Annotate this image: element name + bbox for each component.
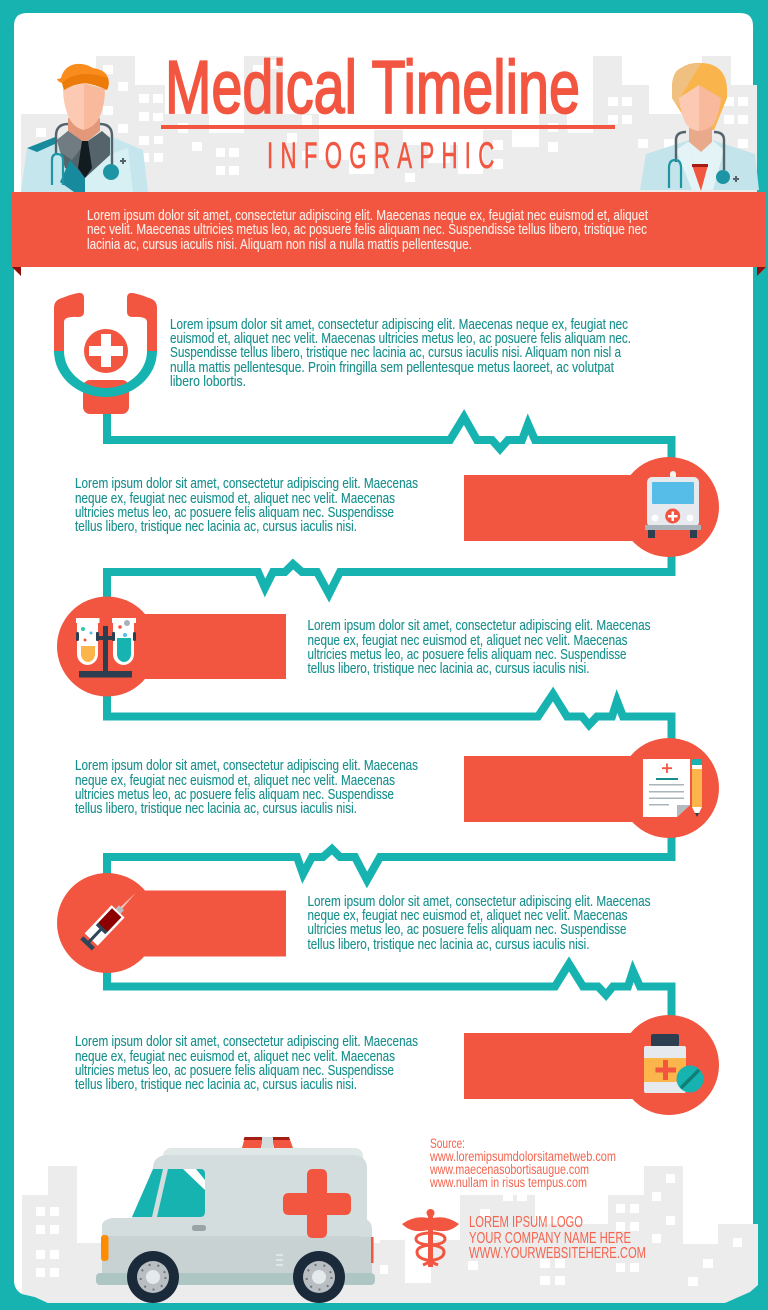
step 4 text (75, 758, 418, 817)
banner text: Lorem ipsum dolor sit amet, consectetur adipiscing elit. Maecenas neque ex, feugiat nec euismod et, aliquet (87, 208, 648, 224)
windshield (132, 1169, 163, 1217)
step 5 syringe icon (57, 873, 157, 973)
step 3 text: tellus libero, tristique nec lacinia ac, cursus iaculis nisi. (308, 661, 590, 677)
step 5 text: ultricies metus leo, ac posuere felis aliquam nec. Suspendisse (308, 922, 626, 938)
male doctor illustration (21, 64, 148, 192)
step 4 text: tellus libero, tristique nec lacinia ac, cursus iaculis nisi. (75, 801, 357, 817)
step 2 text: Lorem ipsum dolor sit amet, consectetur adipiscing elit. Maecenas (75, 476, 418, 492)
banner ribbon (12, 192, 766, 276)
caduceus logo icon (402, 1209, 459, 1267)
banner text: nec velit. Maecenas ultricies metus leo, ac posuere felis aliquam nec. Suspendisse tellus libero, tristique nec (87, 222, 647, 238)
circle (619, 1015, 719, 1115)
step 5 text: neque ex, feugiat nec euismod et, aliquet nec velit. Maecenas (308, 908, 628, 924)
stethoscope start icon (54, 293, 157, 414)
face (63, 83, 84, 130)
ribbon fold right (757, 267, 766, 276)
step 1 text (170, 317, 631, 390)
hair (57, 64, 109, 90)
step 6 bar (464, 1033, 654, 1099)
step 6 text: neque ex, feugiat nec euismod et, aliquet nec velit. Maecenas (75, 1049, 395, 1065)
vents (276, 1255, 283, 1265)
step 2 text (75, 476, 418, 535)
step 2 text: ultricies metus leo, ac posuere felis aliquam nec. Suspendisse (75, 505, 394, 521)
left ear tube (54, 293, 84, 351)
neck (689, 126, 712, 152)
face (679, 85, 699, 131)
hair (672, 63, 727, 130)
coat (640, 140, 759, 190)
top city skyline (21, 56, 757, 192)
right ear tube (127, 293, 157, 351)
logo text: WWW.YOURWEBSITEHERE.COM (469, 1245, 646, 1262)
coat (21, 136, 148, 192)
step 4 bar (464, 756, 654, 822)
lower body (102, 1236, 372, 1273)
step 2 ambulance icon (619, 457, 719, 557)
circle (57, 873, 157, 973)
step 1 text: Lorem ipsum dolor sit amet, consectetur adipiscing elit. Maecenas neque ex, feugiat nec (170, 317, 628, 333)
step 6 text: Lorem ipsum dolor sit amet, consectetur adipiscing elit. Maecenas (75, 1034, 418, 1050)
step 1 text: nulla mattis pellentesque. Proin fringilla sem pellentesque metus laoreet, ac volutpat (170, 360, 614, 376)
side window (157, 1169, 205, 1217)
subtitle: INFOGRAPHIC (267, 135, 502, 176)
step 3 text: Lorem ipsum dolor sit amet, consectetur adipiscing elit. Maecenas (308, 618, 650, 634)
circle (619, 457, 719, 557)
step 3 bar (110, 614, 286, 679)
step 6 pill bottle icon (619, 1015, 719, 1115)
title underline (161, 125, 615, 129)
circle (619, 738, 719, 838)
siren lights (242, 1137, 293, 1148)
step 4 text: Lorem ipsum dolor sit amet, consectetur adipiscing elit. Maecenas (75, 758, 418, 774)
door handle (192, 1225, 206, 1231)
step 6 text: ultricies metus leo, ac posuere felis aliquam nec. Suspendisse (75, 1063, 394, 1079)
female doctor illustration (640, 63, 759, 191)
step 4 text: neque ex, feugiat nec euismod et, aliquet nec velit. Maecenas (75, 773, 395, 789)
source text: www.nullam in risus tempus.com (429, 1175, 587, 1190)
logo text: LOREM IPSUM LOGO (469, 1214, 583, 1231)
step 1 text: libero lobortis. (170, 374, 246, 390)
step 3 text: ultricies metus leo, ac posuere felis aliquam nec. Suspendisse (308, 647, 626, 663)
stethoscope (676, 132, 724, 170)
step 5 text (308, 894, 650, 953)
step 4 text: ultricies metus leo, ac posuere felis aliquam nec. Suspendisse (75, 787, 394, 803)
step 6 text: tellus libero, tristique nec lacinia ac, cursus iaculis nisi. (75, 1077, 357, 1093)
ribbon band (12, 192, 766, 267)
logo text: YOUR COMPANY NAME HERE (469, 1230, 631, 1247)
large ambulance (96, 1137, 375, 1303)
step 3 test tubes icon (57, 596, 157, 696)
step 3 text: neque ex, feugiat nec euismod et, aliquet nec velit. Maecenas (308, 633, 628, 649)
step 5 text: tellus libero, tristique nec lacinia ac, cursus iaculis nisi. (308, 937, 590, 953)
heartbeat timeline path (107, 405, 672, 1030)
chest piece (83, 380, 129, 414)
step 1 text: Suspendisse tellus libero, tristique nec lacinia ac, cursus iaculis nisi. Aliquam non nisl a (170, 345, 621, 361)
banner text: lacinia ac, cursus iaculis nisi. Aliquam non nisl a nulla mattis pellentesque. (87, 237, 472, 253)
step 2 text: tellus libero, tristique nec lacinia ac, cursus iaculis nisi. (75, 519, 357, 535)
source text: www.loremipsumdolorsitametweb.com (429, 1149, 616, 1164)
step 2 text: neque ex, feugiat nec euismod et, aliquet nec velit. Maecenas (75, 491, 395, 507)
rear wheel (293, 1251, 345, 1303)
step 4 document icon (619, 738, 719, 838)
banner text (87, 208, 648, 253)
source text: www.maecenasobortisaugue.com (429, 1162, 589, 1177)
logo text (469, 1214, 646, 1262)
step 2 bar (464, 475, 654, 541)
step 3 text (308, 618, 650, 677)
step 6 text (75, 1034, 418, 1093)
step 1 text: euismod et, aliquet nec velit. Maecenas ultricies metus leo, ac posuere felis aliquam nec. (170, 331, 631, 347)
stethoscope (56, 124, 68, 153)
upper body (102, 1155, 367, 1237)
indicator lights (101, 1235, 108, 1261)
tie (78, 141, 92, 178)
bottom city skyline (22, 1166, 758, 1303)
red cross (283, 1169, 351, 1238)
ribbon fold left (12, 267, 21, 276)
source text: Source: (430, 1136, 465, 1151)
teal tube (54, 351, 157, 397)
neck (68, 118, 100, 143)
step 5 text: Lorem ipsum dolor sit amet, consectetur adipiscing elit. Maecenas (308, 894, 650, 910)
teal collar and lapel (27, 137, 57, 152)
circle (57, 596, 157, 696)
front wheel (127, 1251, 179, 1303)
title: Medical Timeline (165, 45, 580, 129)
bumper (96, 1273, 375, 1285)
roof (163, 1148, 363, 1168)
shirt (57, 131, 110, 178)
medical cross disc (84, 329, 128, 373)
shirt (692, 165, 708, 191)
source text (429, 1136, 616, 1190)
step 5 bar (110, 890, 286, 956)
